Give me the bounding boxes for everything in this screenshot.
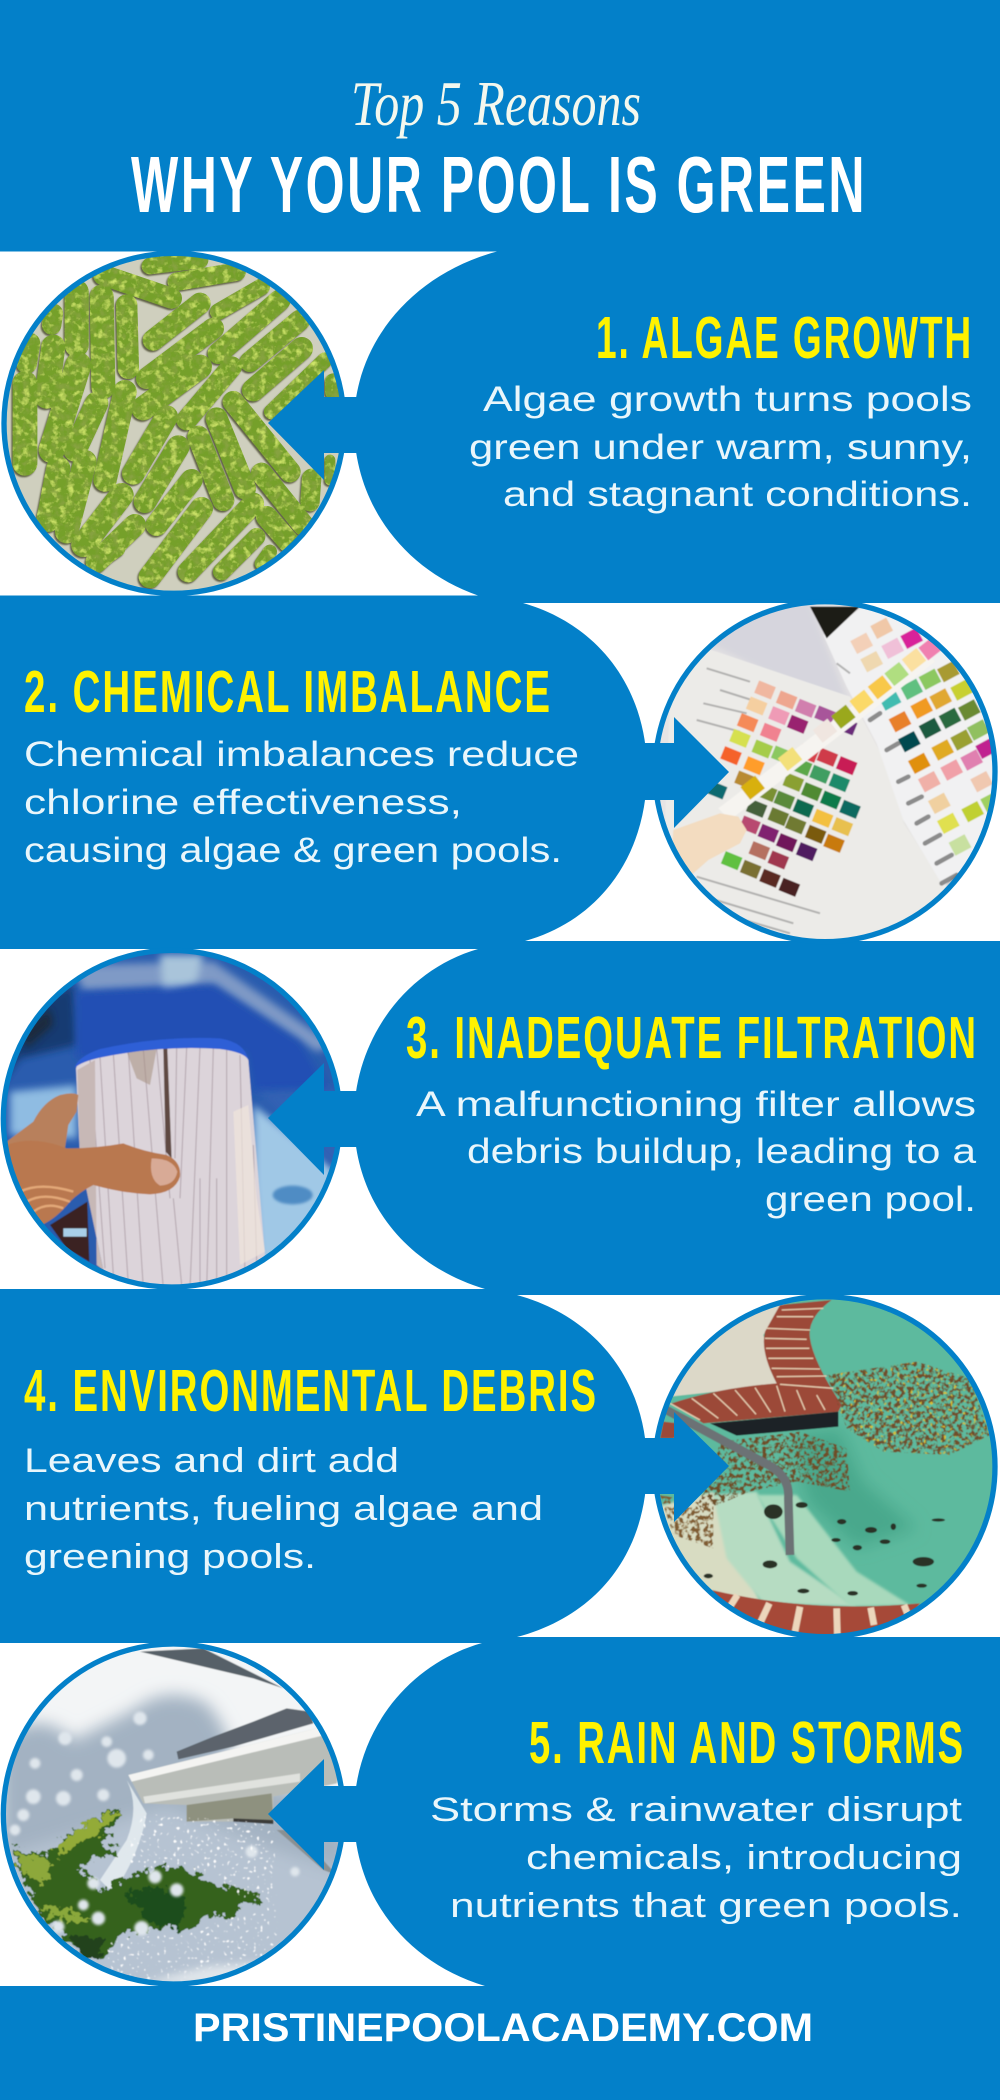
description xyxy=(469,380,972,514)
header title block xyxy=(131,68,867,229)
script subtitle: Top 5 Reasons xyxy=(351,68,641,139)
description: A malfunctioning filter allows xyxy=(416,1085,976,1124)
photo: algae cells under microscope xyxy=(0,250,350,600)
footer website: PRISTINEPOOLACADEMY.COM xyxy=(193,2006,813,2050)
description: chemicals, introducing xyxy=(526,1839,962,1877)
panel: 3 inadequate filtration xyxy=(0,945,978,1295)
description: chlorine effectiveness, xyxy=(24,783,462,822)
panel: 5 rain and storms xyxy=(0,1640,965,1990)
photo: leaves in a green pool xyxy=(650,1295,1000,1645)
arrow pointing left xyxy=(268,370,360,480)
photo: test strip and colour chart xyxy=(650,600,1000,950)
description: causing algae & green pools. xyxy=(24,831,562,870)
description: green under warm, sunny, xyxy=(469,428,972,467)
description: debris buildup, leading to a xyxy=(467,1132,977,1171)
panel: 1 algae growth xyxy=(0,250,973,600)
description: green pool. xyxy=(765,1180,976,1219)
heading: 4. ENVIRONMENTAL DEBRIS xyxy=(24,1358,598,1424)
description: Leaves and dirt add xyxy=(24,1442,399,1480)
arrow pointing right xyxy=(640,1412,729,1522)
description: nutrients, fueling algae and xyxy=(24,1490,543,1528)
arrow pointing left xyxy=(268,1063,360,1175)
description xyxy=(24,1442,543,1576)
description xyxy=(430,1791,963,1925)
description: Storms & rainwater disrupt xyxy=(430,1791,963,1829)
description: and stagnant conditions. xyxy=(503,475,972,514)
description xyxy=(416,1085,977,1219)
description xyxy=(24,735,579,870)
arrow pointing left xyxy=(268,1759,360,1870)
panel: 4 environmental debris xyxy=(24,1295,1000,1645)
photo: hand holding pool filter cartridge xyxy=(0,945,350,1295)
photo: rain overflowing a gutter xyxy=(0,1640,350,1990)
arrow pointing right xyxy=(640,717,729,828)
description: greening pools. xyxy=(24,1538,316,1576)
description: nutrients that green pools. xyxy=(450,1887,962,1925)
heading: 2. CHEMICAL IMBALANCE xyxy=(24,659,552,725)
panel: 2 chemical imbalance xyxy=(24,600,1000,950)
description: Algae growth turns pools xyxy=(483,380,972,419)
description: Chemical imbalances reduce xyxy=(24,735,579,774)
